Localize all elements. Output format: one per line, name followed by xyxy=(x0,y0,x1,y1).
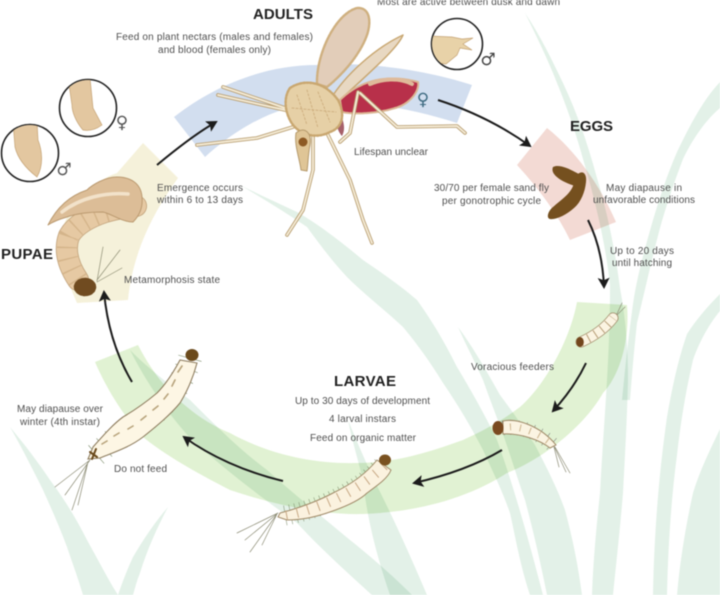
text: larvae facts: Up to 30 days of development xyxy=(295,396,430,407)
text: larval diapause: May diapause over xyxy=(17,404,104,415)
grass blade: small under text xyxy=(348,420,427,595)
text: emergence: Emergence occurs xyxy=(157,183,243,194)
text: hatching: until hatching xyxy=(612,258,672,269)
stage band: eggs xyxy=(517,128,616,240)
grass blade: long central xyxy=(240,185,543,595)
inset: male pupa terminalia xyxy=(2,122,58,182)
illustration: fourth instar larva xyxy=(55,349,198,510)
arrow: larva to third larva xyxy=(414,450,502,483)
grass blade: bottom right corner xyxy=(677,429,720,595)
text: larvae facts: 4 larval instars xyxy=(329,414,396,425)
text: egg diapause: unfavorable conditions xyxy=(593,195,695,206)
symbol: female adult: ♀ xyxy=(417,90,429,110)
illustration: adult sand fly xyxy=(197,8,465,243)
heading: eggs: EGGS xyxy=(570,118,613,135)
inset: female pupa terminalia xyxy=(60,78,116,136)
text: do not feed: Do not feed xyxy=(114,464,167,475)
arrow: fourth instar to pupa xyxy=(104,292,132,382)
text: larvae facts xyxy=(295,396,430,444)
grass blade: behind larvae left to centre xyxy=(130,350,412,595)
text: adult feeding: Feed on plant nectars (males and females) xyxy=(116,32,313,43)
arrow: adults to eggs xyxy=(438,100,530,146)
text: eggs per female: 30/70 per female sand fly xyxy=(434,183,549,194)
arrow: pupae to adults xyxy=(157,122,216,165)
pupa wing case xyxy=(48,177,142,225)
fly thorax texture xyxy=(292,90,336,128)
fly abdomen xyxy=(340,78,418,113)
fly abdomen highlight xyxy=(370,80,412,84)
fly abdomen underside xyxy=(337,112,344,136)
heading: adults: ADULTS xyxy=(253,6,313,23)
symbol: male: ♂ xyxy=(56,160,72,180)
symbol: female: ♀ xyxy=(116,113,128,133)
illustration: second larva xyxy=(492,420,570,473)
text: metamorphosis: Metamorphosis state xyxy=(124,275,220,286)
fly eye xyxy=(298,138,308,146)
illustration: third larva xyxy=(237,454,391,552)
stage band: larvae xyxy=(95,302,628,514)
text: adult lifespan: Lifespan unclear xyxy=(354,147,429,158)
text: larval diapause: winter (4th instar) xyxy=(19,417,100,428)
text: eggs per female xyxy=(434,183,549,207)
text: emergence: within 6 to 13 days xyxy=(156,195,243,206)
pupa breathing bristles xyxy=(97,247,122,282)
heading: pupae: PUPAE xyxy=(1,246,53,263)
text: eggs per female: per gonotrophic cycle xyxy=(442,196,541,207)
symbol: male adult: ♂ xyxy=(480,50,496,70)
inset: male adult terminalia xyxy=(430,18,482,70)
fly thorax xyxy=(286,83,342,136)
fourth instar segment marks xyxy=(102,366,182,444)
text: hatching: Up to 20 days xyxy=(610,246,674,257)
grass blade: lower central xyxy=(458,327,582,595)
heading: larvae: LARVAE xyxy=(334,373,396,390)
text: adult feeding xyxy=(116,32,313,56)
fly head and proboscis xyxy=(296,130,310,171)
stage band: adults xyxy=(174,64,472,157)
arrow: eggs to larvae xyxy=(588,220,604,287)
fly legs xyxy=(197,87,465,243)
arrow: larva to fourth instar xyxy=(184,437,283,481)
text: adult feeding: and blood (females only) xyxy=(158,45,271,56)
pupa wing stripe xyxy=(62,194,128,212)
text: egg diapause: May diapause in xyxy=(606,183,682,194)
pupa larval skin xyxy=(75,279,95,295)
egg upper xyxy=(552,166,585,187)
grass blade: bottom left long xyxy=(10,427,118,595)
illustration: eggs xyxy=(548,166,586,219)
arrow: young larva to older larva xyxy=(553,363,586,411)
text: hatching xyxy=(610,246,674,269)
egg lower xyxy=(548,172,586,219)
fly wing narrow xyxy=(330,35,403,100)
fly wing large xyxy=(317,8,369,87)
grass blade: bottom left short xyxy=(118,507,168,595)
text: larvae facts: Feed on organic matter xyxy=(310,433,417,444)
grass blade: far right xyxy=(653,294,720,595)
stage band: pupae xyxy=(61,143,178,303)
grass blade: tall right xyxy=(525,13,628,595)
grass blade: curving right xyxy=(622,82,720,400)
text: larval diapause xyxy=(17,404,104,428)
pupa body xyxy=(67,206,136,280)
illustration: pupa xyxy=(48,177,142,295)
illustration: first larva xyxy=(576,303,625,347)
text: emergence xyxy=(156,183,243,206)
text: voracious feeders: Voracious feeders xyxy=(471,362,554,373)
text: egg diapause xyxy=(593,183,695,206)
